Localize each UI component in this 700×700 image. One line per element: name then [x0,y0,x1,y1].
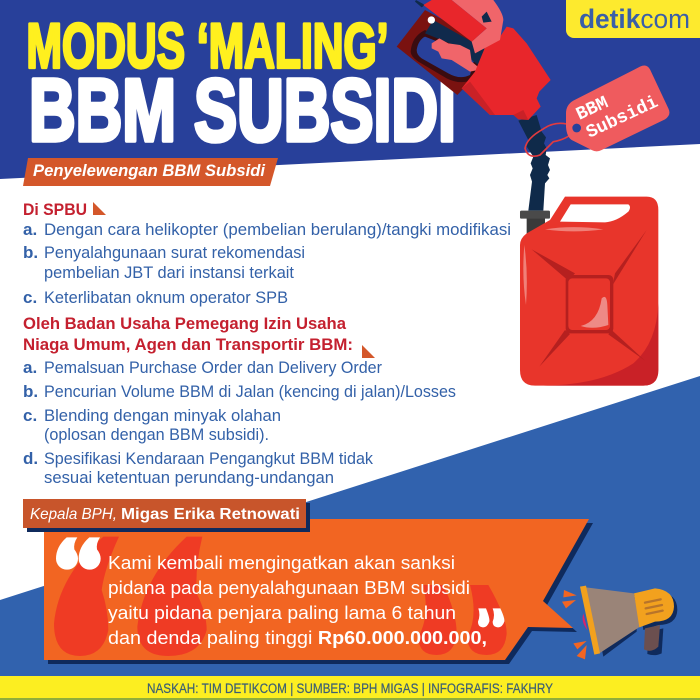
section: Di SPBU: Penyalahgunaan surat rekomendasi [44,243,305,262]
white closing quote marks [478,608,504,627]
white opening quote marks [56,537,101,570]
heading: Penyelewengan BBM Subsidi: Penyelewengan BBM Subsidi [33,161,266,180]
callout: quote bubble: dan denda paling tinggi Rp60.000.000.000, [108,627,487,648]
callout: quote bubble: yaitu pidana penjara paling lama 6 tahun [108,602,456,623]
section: Oleh Badan Usaha: c. [23,406,37,425]
section: Oleh Badan Usaha: d. [23,449,38,468]
title: BBM SUBSIDI [29,60,456,160]
icon: fuel hose [518,115,574,211]
icon: megaphone [562,586,677,659]
section: Oleh Badan Usaha: Pencurian Volume BBM di Jalan (kencing di jalan)/Losses [44,382,456,401]
logo: detikcom: detikcom [579,4,690,34]
section: Oleh Badan Usaha: Spesifikasi Kendaraan Pengangkut BBM tidak [44,449,373,468]
section: Oleh Badan Usaha: Pemalsuan Purchase Order dan Delivery Order [44,358,382,377]
section: Di SPBU: pembelian JBT dari instansi terkait [44,263,294,282]
callout: quote bubble [44,519,593,664]
tag: BBM Subsidi [566,65,669,151]
section: Oleh Badan Usaha: Oleh Badan Usaha Pemegang Izin Usaha [23,314,347,333]
callout: quote bubble: Kami kembali mengingatkan akan sanksi [108,552,455,573]
footer credits: NASKAH: TIM DETIKCOM | SUMBER: BPH MIGAS | INFOGRAFIS: FAKHRY [147,681,553,696]
logo: detikcom [566,0,700,38]
section: Oleh Badan Usaha [23,314,456,487]
section: Di SPBU: a. [23,220,37,239]
label: Kepala BPH [23,499,310,532]
section: Oleh Badan Usaha: (oplosan dengan BBM subsidi). [44,425,269,444]
section: Di SPBU: c. [23,288,37,307]
section: Oleh Badan Usaha: b. [23,382,38,401]
label: Kepala BPH: Kepala BPH, [30,506,117,523]
big closing quote marks [418,585,507,655]
icon: jerry can [520,197,658,386]
tag: BBM Subsidi: BBM [573,92,612,125]
section: Di SPBU: Keterlibatan oknum operator SPB [44,288,288,307]
icon: fuel nozzle with hand [397,0,551,120]
title: MODUS ‘MALING’ [26,12,388,82]
section: Oleh Badan Usaha: Niaga Umum, Agen dan Transportir BBM: [23,335,353,354]
label: Kepala BPH: Migas Erika Retnowati [121,506,300,523]
section: Di SPBU: Dengan cara helikopter (pembelian berulang)/tangki modifikasi [44,220,511,239]
footer credits [0,676,700,700]
section: Oleh Badan Usaha: Blending dengan minyak olahan [44,406,281,425]
section: Di SPBU: b. [23,243,38,262]
section: Oleh Badan Usaha: sesuai ketentuan perundang-undangan [44,468,334,487]
callout: quote bubble: pidana pada penyalahgunaan BBM subsidi [108,577,470,598]
big opening quote marks [54,537,207,656]
section: Di SPBU: Di SPBU [23,200,87,219]
tag: BBM Subsidi: Subsidi [583,92,662,143]
section: Oleh Badan Usaha: a. [23,358,37,377]
heading: Penyelewengan BBM Subsidi [23,158,278,186]
title [26,12,456,160]
section: Di SPBU [23,200,511,307]
